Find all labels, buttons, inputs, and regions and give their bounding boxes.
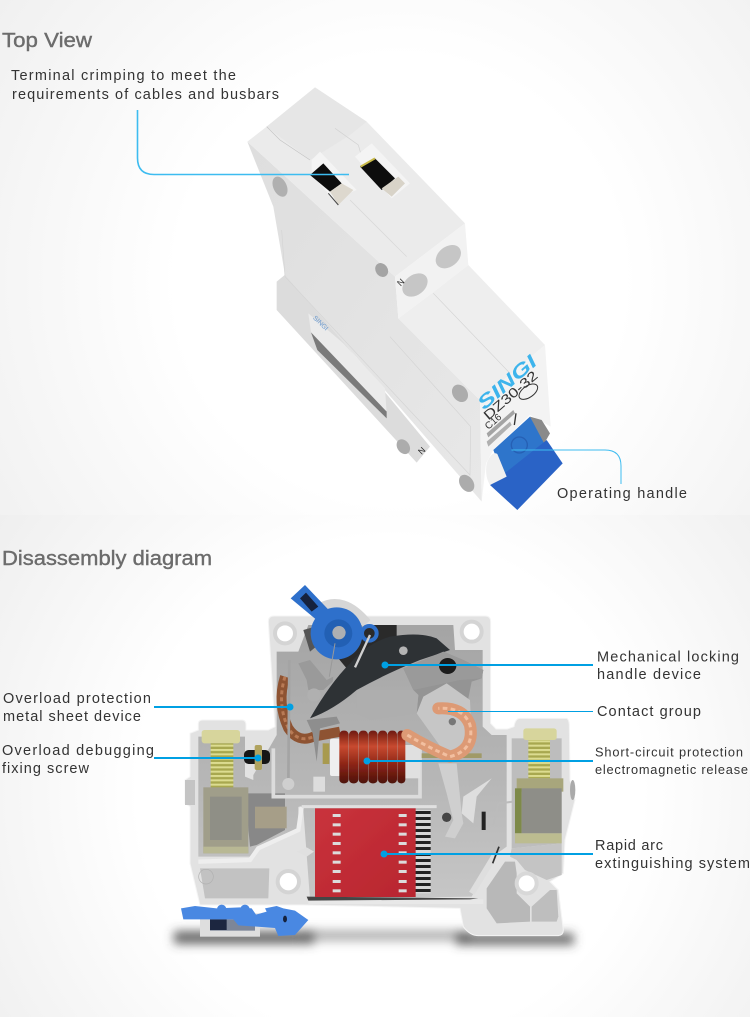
- callout: rapid arc extinguishing system: extinguishing system: [595, 856, 750, 872]
- callout: rapid arc extinguishing system: Rapid arc: [595, 838, 663, 854]
- product photo: breaker top view: [247, 87, 563, 510]
- callout: contact group: Contact group: [597, 704, 701, 720]
- background: top section: [0, 0, 750, 515]
- grey trip pieces: [298, 660, 340, 762]
- front label: [473, 350, 542, 447]
- interior cavity: [198, 625, 507, 899]
- grey locking bracket: [403, 652, 483, 713]
- walls: [273, 748, 420, 797]
- heading: Top View: Top View: [2, 29, 92, 52]
- front label: DZ30-32: [480, 368, 541, 423]
- arc extinguishing stack: [315, 808, 431, 897]
- callout: short-circuit protection electromagnetic release: [364, 744, 748, 777]
- callout: overload debugging fixing screw: fixing screw: [2, 761, 90, 777]
- black locking lever: [310, 635, 450, 718]
- front label: SINGI: [473, 350, 542, 414]
- callout: mechanical locking handle device: Mechanical locking: [597, 650, 739, 666]
- arc chute rail: [472, 802, 513, 893]
- callout: short-circuit protection electromagnetic release: Short-circuit protection: [595, 744, 743, 760]
- text: terminal crimping caption: requirements of cables and busbars: [12, 87, 279, 103]
- callout: overload protection metal sheet: metal sheet device: [3, 709, 141, 725]
- overload debugging screw: [244, 745, 270, 770]
- overload bimetal and copper: [282, 660, 340, 790]
- mounting holes: [275, 622, 482, 892]
- text: terminal crimping caption: Terminal crimping to meet the: [11, 68, 236, 84]
- leader line: terminal crimping: [138, 110, 349, 174]
- callout: overload debugging fixing screw: [2, 743, 262, 777]
- housing: [185, 616, 575, 936]
- callout: mechanical locking handle device: [382, 650, 739, 683]
- operating handle: [486, 417, 563, 510]
- callout: overload protection metal sheet: [3, 691, 294, 725]
- ground shadow: [174, 930, 574, 945]
- callout: rapid arc extinguishing system: [380, 838, 750, 872]
- callout: short-circuit protection electromagnetic release: electromagnetic release: [595, 762, 748, 777]
- product photo: breaker disassembly: [181, 585, 575, 937]
- terminal slots: [310, 143, 410, 205]
- side sticker: [308, 313, 387, 418]
- contact plate: [417, 683, 472, 760]
- leader line: operating handle: [512, 450, 621, 484]
- moving contact arm: [438, 763, 492, 838]
- callout: overload debugging fixing screw: Overload debugging: [2, 743, 154, 759]
- left terminal: [185, 730, 287, 853]
- right terminal cavity: [512, 738, 562, 848]
- blue handle: [291, 585, 377, 677]
- blue DIN clip: [181, 905, 308, 937]
- product photo: breaker top view: N: [395, 277, 407, 288]
- side sticker: SINGI: [311, 315, 329, 332]
- heading: Disassembly diagram: Disassembly diagram: [2, 547, 212, 570]
- text: Operating handle: Operating handle: [557, 486, 687, 502]
- electromagnetic release coil: [313, 731, 482, 792]
- text: terminal crimping caption: [11, 68, 279, 103]
- right terminal: [515, 728, 575, 843]
- copper braid: [407, 708, 471, 757]
- product photo: breaker top view: N: [416, 445, 428, 456]
- rail foot: [487, 862, 558, 923]
- grey lever head: [403, 652, 483, 690]
- lower-left chamber: [200, 868, 269, 898]
- front label: C16: [483, 412, 504, 432]
- background: bottom section: [0, 515, 750, 1017]
- callout: overload protection metal sheet: Overload protection: [3, 691, 151, 707]
- callout: mechanical locking handle device: handle device: [597, 667, 701, 683]
